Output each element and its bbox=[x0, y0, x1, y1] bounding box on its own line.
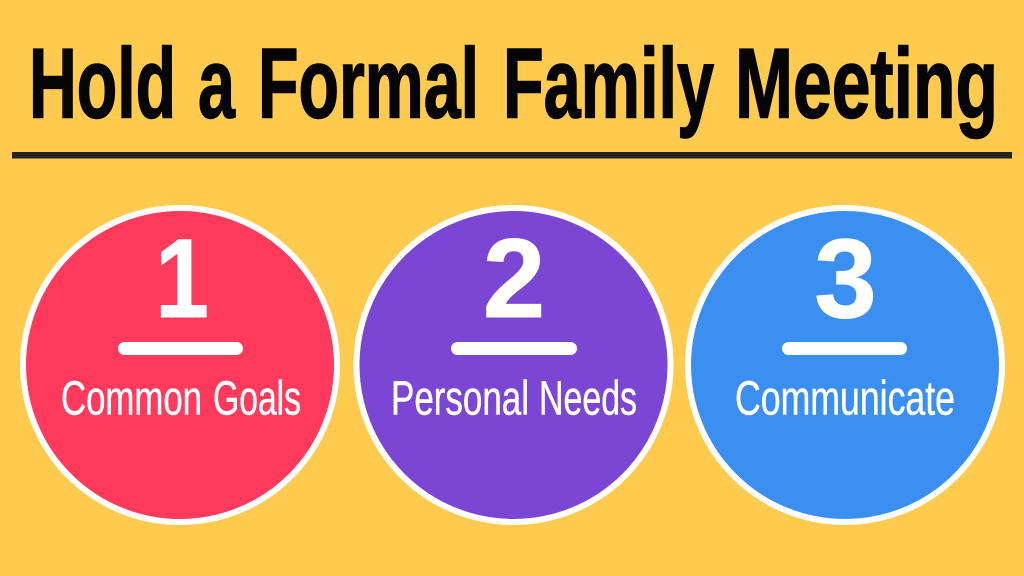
title: Family bbox=[503, 28, 714, 138]
panel: step 3 Communicate bbox=[688, 208, 1002, 522]
title bbox=[29, 28, 998, 138]
bar: step 2 bbox=[451, 342, 577, 355]
number 3: 3 bbox=[814, 216, 877, 341]
bar: step 3 bbox=[782, 342, 907, 355]
circle: step 1 bbox=[23, 208, 337, 522]
circle: step 3 bbox=[688, 208, 1002, 522]
label: Common Goals: Goals bbox=[213, 372, 301, 426]
title: a bbox=[198, 28, 236, 138]
title: Formal bbox=[258, 28, 479, 138]
bar: step 1 bbox=[118, 342, 243, 355]
label: Common Goals: Common bbox=[61, 372, 202, 426]
label: Communicate: Communicate bbox=[735, 372, 955, 426]
panel: step 2 Personal Needs bbox=[356, 208, 670, 522]
number 2: 2 bbox=[483, 216, 545, 341]
circle: step 2 bbox=[356, 208, 670, 522]
title: Hold bbox=[29, 28, 176, 138]
number 1: 1 bbox=[155, 216, 209, 342]
label: Personal Needs: Needs bbox=[539, 372, 637, 426]
panel: step 1 Common Goals bbox=[23, 208, 337, 522]
label: Personal Needs: Personal bbox=[391, 372, 529, 426]
